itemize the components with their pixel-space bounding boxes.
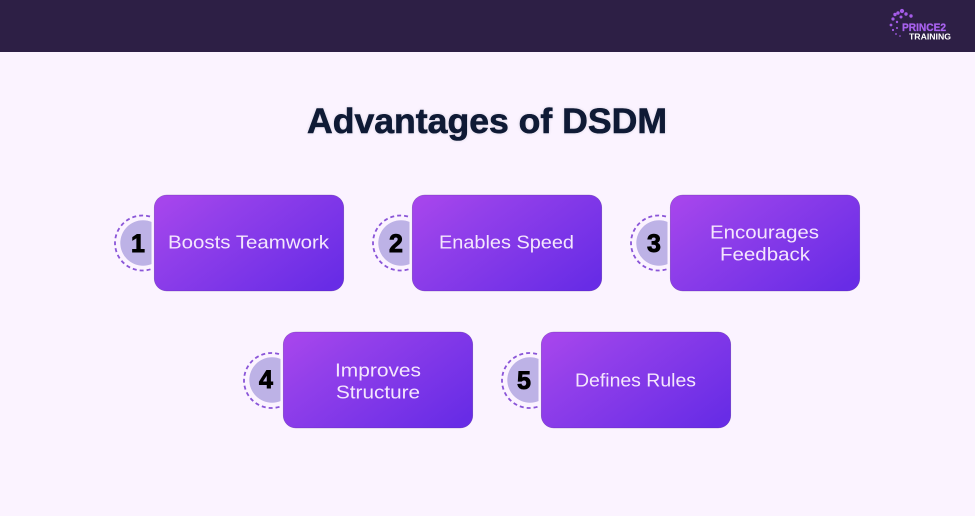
badge 3: 3 (647, 230, 661, 258)
title: Advantages of DSDM (307, 102, 667, 141)
item 5: Defines Rules (502, 330, 734, 430)
card 3 (668, 192, 862, 294)
card 4: Structure (336, 382, 420, 402)
item 4: Improves Structure (244, 330, 476, 430)
card 1 (152, 192, 346, 294)
item 3: Encourages Feedback (631, 192, 862, 294)
badge 1: 1 (131, 230, 145, 258)
logo text: PRINCE2: PRINCE2 (902, 22, 946, 34)
card 1: Boosts Teamwork (168, 232, 330, 252)
item 2: Enables Speed (373, 192, 604, 294)
title: Advantages of DSDM (307, 102, 667, 141)
card 4 (280, 330, 476, 430)
badge 3 (631, 216, 686, 270)
badge 4 (244, 353, 299, 408)
logo: PRINCE2 Training (890, 9, 951, 41)
badge 1 (115, 216, 170, 270)
card 4: Improves (335, 360, 421, 380)
icon: logo dots (890, 9, 913, 37)
header bar (0, 0, 975, 52)
badge 5 (502, 353, 557, 408)
card 3: Encourages (710, 222, 819, 242)
badge 2 (373, 216, 428, 270)
card 5: Defines Rules (575, 370, 696, 390)
item 1: Boosts Teamwork (115, 192, 346, 294)
card 5 (538, 330, 734, 430)
logo text: TRAINING: TRAINING (909, 32, 951, 42)
badge 4: 4 (259, 366, 273, 394)
card 2: Enables Speed (439, 232, 574, 252)
card 3: Feedback (720, 244, 811, 264)
card 2 (410, 192, 604, 294)
badge 2: 2 (389, 230, 403, 258)
badge 5: 5 (517, 367, 531, 395)
